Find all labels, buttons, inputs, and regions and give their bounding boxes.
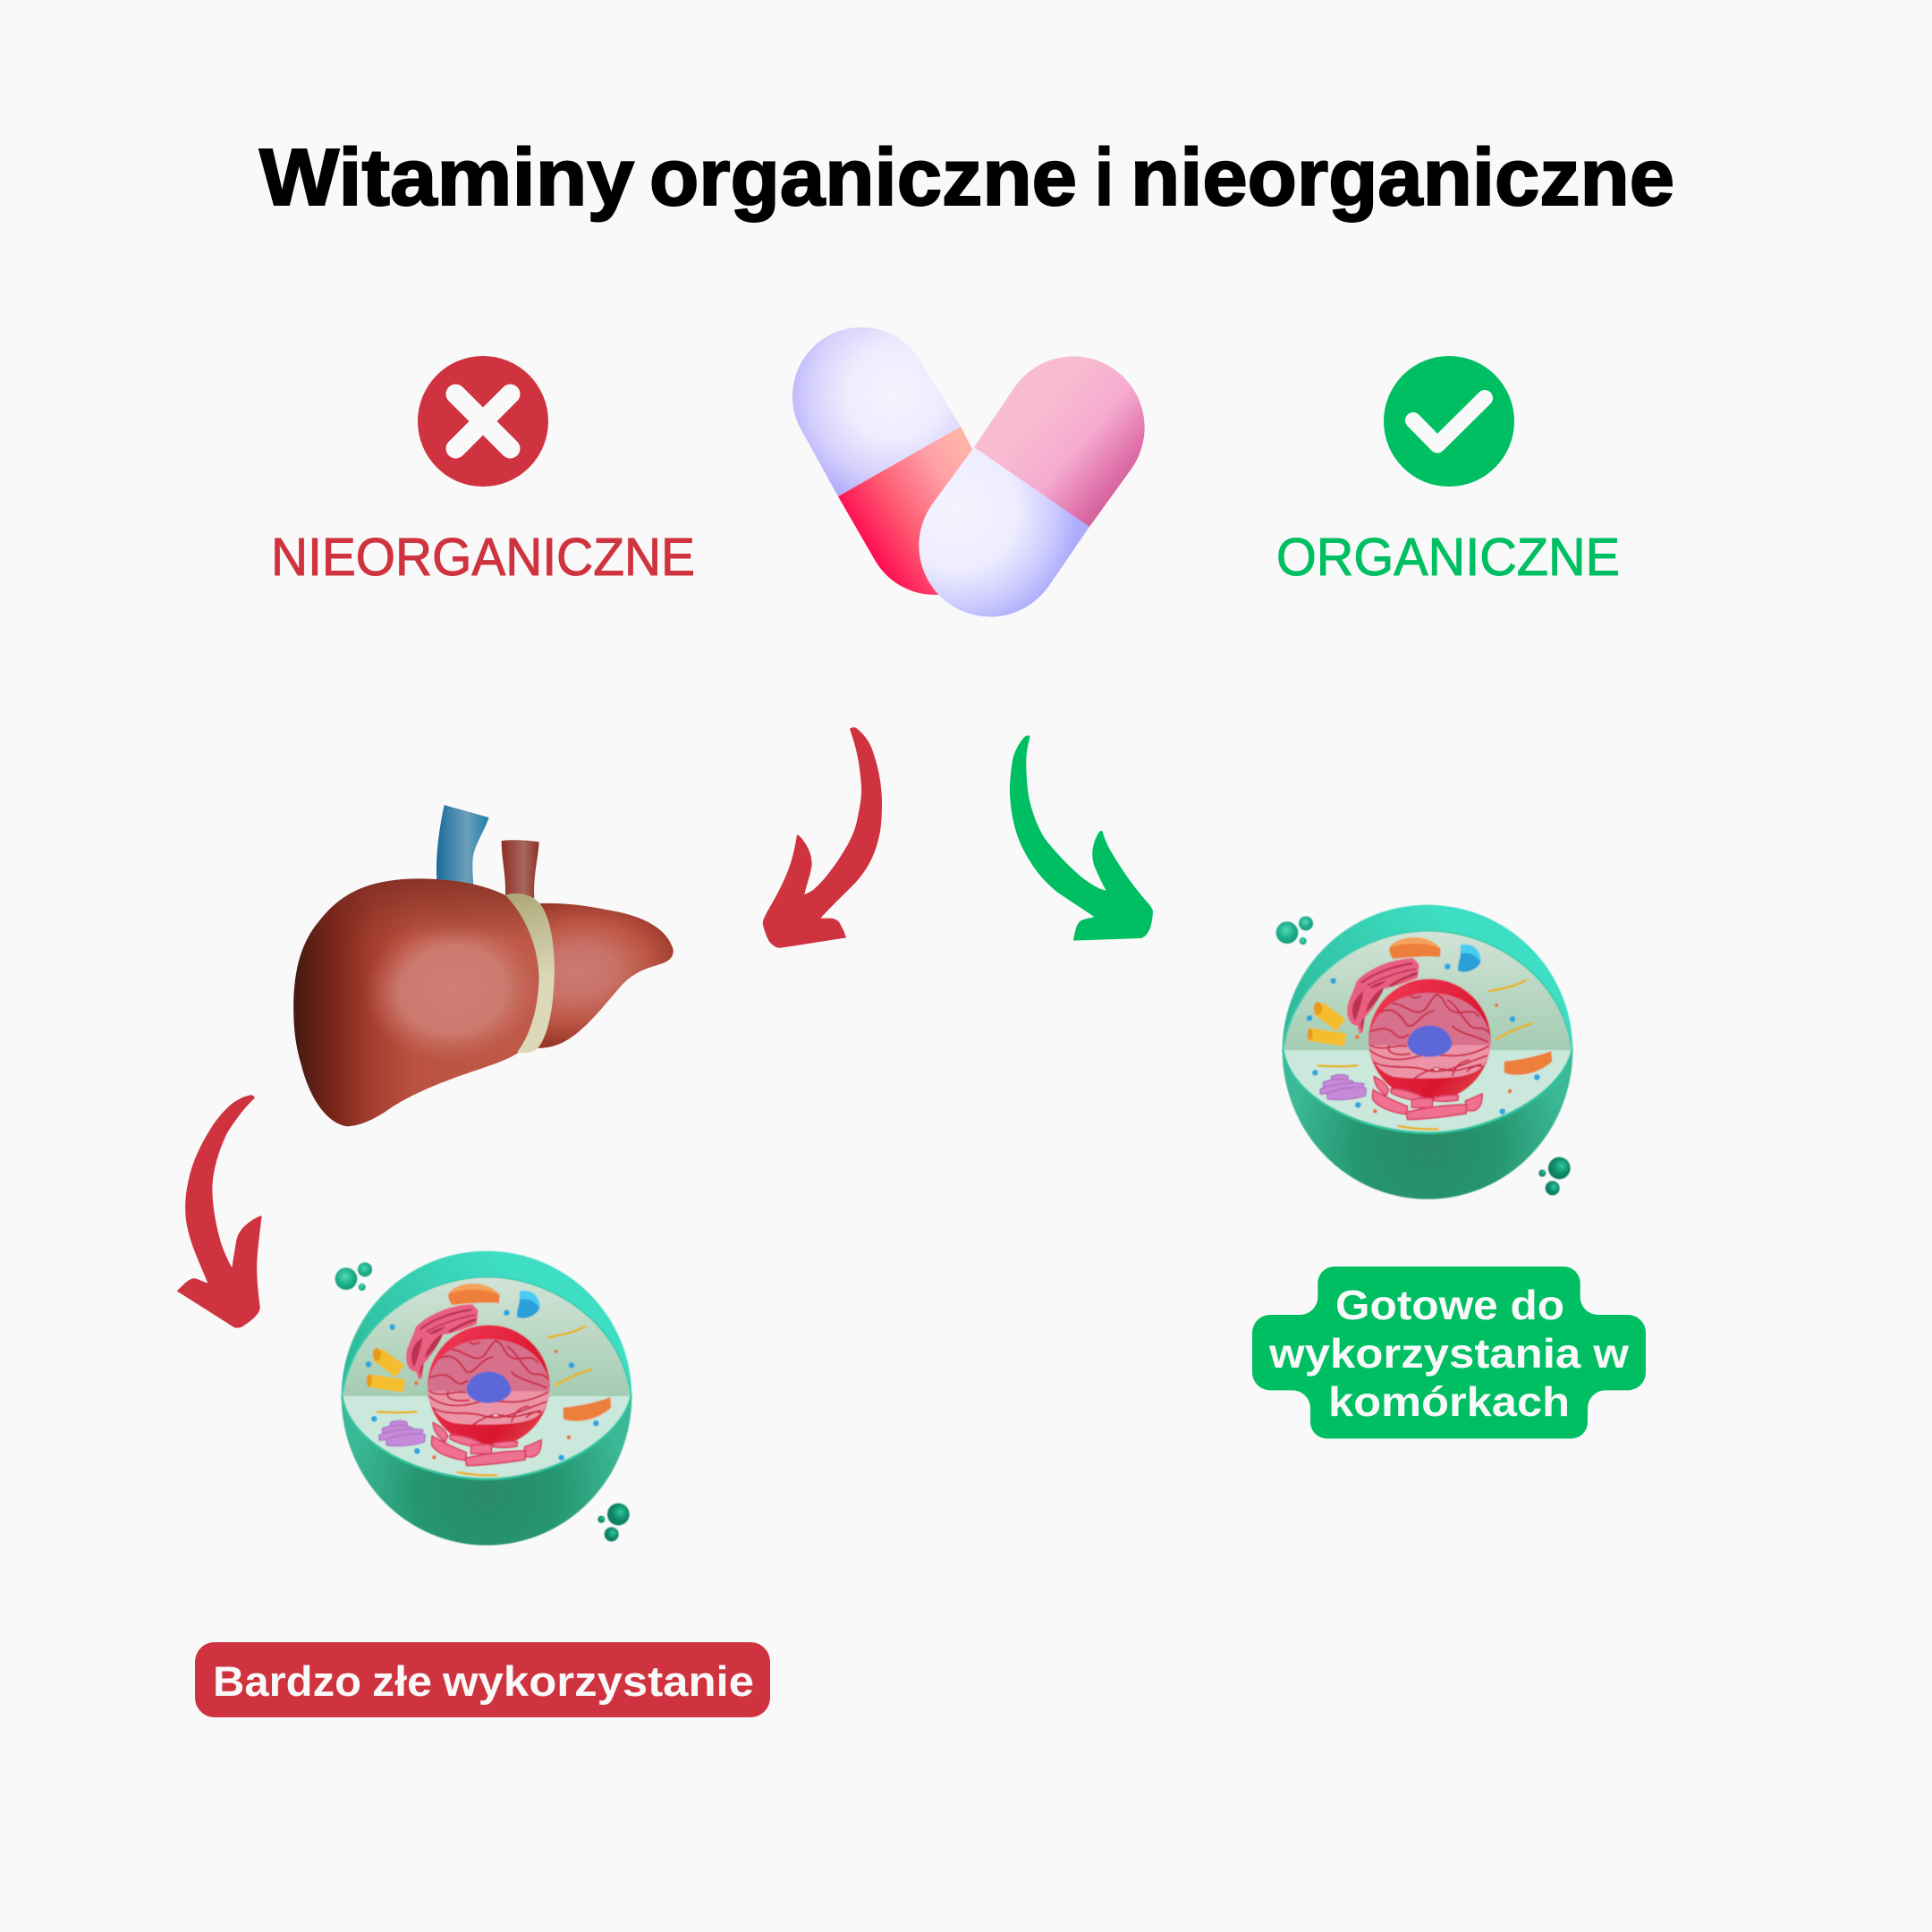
liver right lobe — [530, 903, 674, 1048]
centrioles: yellow — [1308, 1002, 1345, 1041]
arrow: red to cell — [177, 1095, 262, 1328]
label: organiczne: ORGANICZNE — [1276, 528, 1620, 587]
artery: red — [502, 840, 539, 898]
badge: bardzo złe wykorzystanie: Bardzo — [213, 1657, 361, 1705]
organelle: orange top — [1389, 937, 1441, 959]
badge: gotowe do wykorzystania w komórkach: wykorzystania w — [1268, 1330, 1629, 1377]
icon: red cross — [418, 356, 548, 487]
icon: animal cell — [1276, 905, 1577, 1199]
icon: two vitamin capsules — [792, 327, 1145, 617]
endoplasmic reticulum: lower — [1372, 1076, 1482, 1120]
filaments: yellow — [1318, 980, 1532, 1129]
capsule: left — [792, 327, 1004, 595]
organelle: orange right — [1504, 1051, 1552, 1075]
arrow: red to liver — [763, 727, 882, 948]
title: i — [1095, 133, 1114, 223]
nucleolus — [1407, 1026, 1452, 1057]
vein: blue — [436, 805, 489, 886]
label: nieorganiczne: NIEORGANICZNE — [271, 528, 695, 587]
panel: organiczne header — [1276, 356, 1620, 587]
badge: bardzo złe wykorzystanie — [195, 1642, 770, 1717]
badge: bardzo złe wykorzystanie: złe — [372, 1657, 432, 1705]
golgi: purple — [1320, 1074, 1366, 1100]
icon: green check — [1384, 356, 1514, 487]
floating spheres — [1276, 916, 1571, 1195]
title — [259, 133, 1674, 223]
capsule: right — [919, 356, 1145, 617]
title: nieorganiczne — [1131, 133, 1674, 223]
cell membrane — [1283, 905, 1572, 1199]
nucleus — [1366, 979, 1494, 1101]
title: Witaminy — [259, 133, 634, 223]
badge: bardzo złe wykorzystanie: wykorzystanie — [442, 1657, 754, 1705]
badge: gotowe do wykorzystania w komórkach: Gotowe do — [1335, 1282, 1564, 1328]
ligament band — [505, 894, 555, 1053]
icon: animal cell (liver path) — [335, 1251, 636, 1546]
badge: gotowe do wykorzystania w komórkach — [1252, 1267, 1646, 1438]
liver main lobe — [293, 878, 539, 1126]
icon: liver — [293, 805, 674, 1126]
title: organiczne — [649, 133, 1077, 223]
badge: gotowe do wykorzystania w komórkach: komórkach — [1328, 1378, 1570, 1425]
small vesicles — [1307, 963, 1540, 1114]
cytoplasm interior — [1279, 928, 1577, 1137]
endoplasmic reticulum: upper — [1347, 958, 1419, 1034]
organelle: blue — [1458, 945, 1480, 972]
arrow: green to cell — [1010, 735, 1153, 941]
panel: nieorganiczne header — [271, 356, 695, 587]
